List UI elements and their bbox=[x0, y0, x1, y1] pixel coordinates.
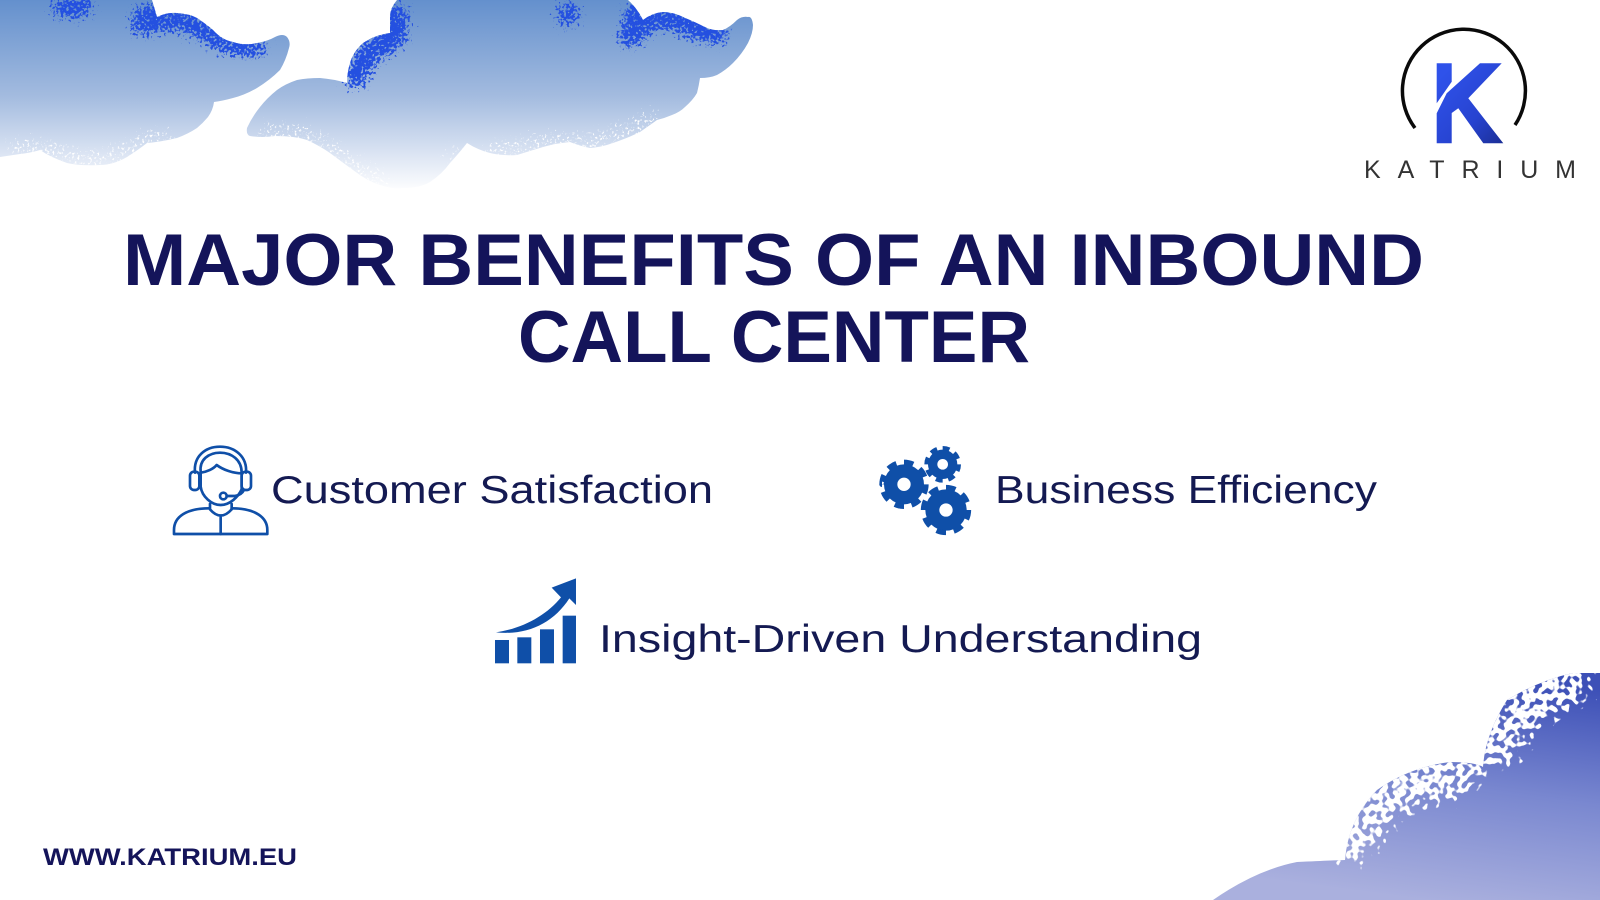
label: Insight-Driven Understanding bbox=[599, 618, 1202, 661]
cloud: top centre bbox=[247, 0, 753, 188]
logo arc bbox=[1402, 29, 1525, 128]
logo wordmark: KATRIUM bbox=[1364, 156, 1576, 184]
benefit: insight-driven understanding bbox=[495, 578, 1202, 663]
title: CALL CENTER bbox=[518, 297, 1030, 378]
cloud: top left bbox=[0, 0, 290, 165]
label: Business Efficiency bbox=[995, 469, 1378, 512]
icon: support agent with headset bbox=[174, 447, 267, 534]
label: Customer Satisfaction bbox=[271, 469, 713, 512]
title bbox=[123, 220, 1424, 378]
logo: Katrium bbox=[1364, 29, 1576, 184]
benefit: business efficiency bbox=[882, 448, 1378, 533]
icon: gears bbox=[882, 448, 969, 533]
website url: WWW.KATRIUM.EU bbox=[43, 844, 297, 871]
title: MAJOR BENEFITS OF AN INBOUND bbox=[123, 220, 1424, 301]
icon: rising bar chart with arrow bbox=[495, 578, 576, 663]
benefit: customer satisfaction bbox=[174, 447, 713, 534]
cloud: bottom right bbox=[1213, 673, 1600, 900]
logo letter K bbox=[1437, 63, 1503, 143]
